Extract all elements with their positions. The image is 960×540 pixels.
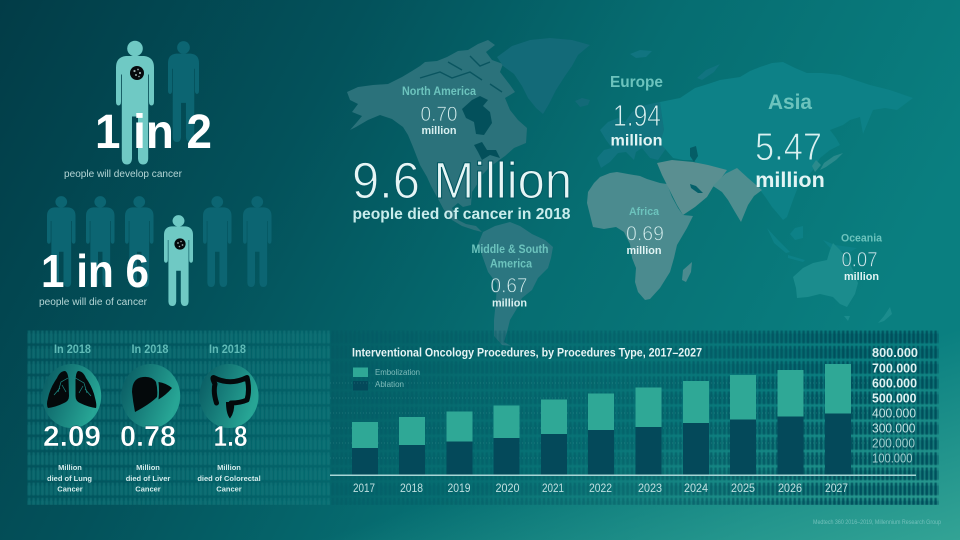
x axis labels: 2027 [825, 481, 848, 495]
caption: liver cancer: Million [136, 463, 160, 472]
caption: lung cancer: Cancer [57, 484, 83, 494]
region: Oceania: million [844, 271, 879, 283]
caption: colorectal cancer [197, 463, 261, 494]
caption: liver cancer [126, 463, 170, 494]
caption: die of cancer: people will die of cancer [39, 297, 148, 308]
icon: tumor [174, 238, 186, 250]
y axis labels: 800.000 [872, 345, 918, 360]
map: North America [347, 40, 527, 232]
icon: affected person [116, 41, 154, 165]
caption: colorectal cancer: Cancer [216, 484, 242, 494]
y axis labels: 700.000 [872, 360, 917, 376]
region: Asia: Asia [768, 91, 812, 114]
panel: liver cancer [120, 344, 180, 494]
caption: develop cancer: people will develop cancer [64, 169, 183, 180]
icons: unaffected people [47, 196, 272, 287]
x axis labels: 2023 [638, 481, 662, 495]
panel: colorectal cancer [197, 344, 261, 494]
icon: affected person [164, 215, 193, 306]
icon: liver [121, 364, 180, 428]
region: Oceania: 0.07 [842, 248, 878, 272]
chart legend: Embolization [375, 368, 420, 377]
map: Persian Gulf [690, 184, 703, 193]
y axis labels [872, 345, 918, 406]
statistic: 1 in 6: 1 in 6 [41, 245, 149, 297]
chart: interventional oncology procedures [330, 345, 918, 495]
panel: lung cancer: In 2018 [54, 344, 92, 356]
y axis labels: 600.000 [872, 376, 917, 390]
region: Asia: 5.47 [755, 126, 822, 169]
map: Madagascar [682, 262, 692, 282]
region: Europe [610, 74, 663, 150]
x axis labels: 2022 [589, 481, 612, 495]
map: South America [478, 222, 553, 346]
x axis labels: 2020 [496, 481, 520, 495]
icon: lungs [42, 364, 101, 428]
headline: 9.6 Million: 9.6 Million [352, 152, 572, 209]
crowd pattern band [27, 330, 939, 505]
caption: lung cancer: Million [58, 463, 82, 472]
map: Scandinavia and Arctic islands [603, 50, 720, 136]
panel: lung cancer [42, 344, 101, 494]
map: New Zealand and Tasmania [844, 307, 892, 323]
region: Middle and South America: America [490, 258, 533, 270]
caption: colorectal cancer: died of Colorectal [197, 474, 261, 483]
region: Asia: million [755, 169, 825, 192]
map: Middle East [657, 160, 727, 215]
y axis labels: 500.000 [872, 390, 916, 406]
region: North America: million [422, 125, 457, 137]
map: Arctic channels [420, 56, 502, 92]
region: North America: North America [402, 86, 477, 98]
x axis labels: 2021 [542, 481, 564, 495]
caption: liver cancer: died of Liver [126, 474, 170, 483]
panel: 1 in 2 [64, 41, 212, 180]
region: North America [402, 86, 477, 137]
chart: interventional oncology procedures: 100.000 [872, 450, 912, 466]
chart legend: Ablation [375, 380, 404, 389]
statistic: 2.09 million: 2.09 [43, 421, 101, 453]
region: Middle and South America: Middle & South [472, 244, 548, 256]
region: Middle and South America: million [492, 298, 527, 310]
statistic: 1 in 2: 1 in 2 [95, 106, 212, 159]
map: Africa [587, 172, 693, 300]
chart: interventional oncology procedures: 300.000 [872, 420, 916, 436]
map: India [713, 168, 762, 222]
map: Southeast Asia islands [767, 226, 857, 262]
chart axis line [330, 474, 916, 476]
region: Africa: Africa [629, 206, 660, 218]
source note: Medtech 360 2016–2019, Millennium Research Group [813, 520, 942, 526]
x axis labels: 2018 [400, 481, 423, 495]
region: Middle and South America [472, 244, 548, 310]
region: North America: 0.70 [420, 103, 458, 126]
panel: 1 in 6 [39, 196, 272, 308]
x axis labels: 2024 [684, 481, 708, 495]
caption: colorectal cancer: Million [217, 463, 241, 472]
panel: liver cancer: In 2018 [132, 344, 169, 356]
caption: lung cancer [47, 463, 92, 494]
map: Greenland [497, 38, 590, 114]
region: Africa [626, 206, 664, 257]
map: Europe [597, 102, 667, 168]
region: Asia [755, 91, 825, 192]
region: Oceania [841, 232, 883, 283]
region: Europe: 1.94 [613, 98, 661, 133]
map: Caspian Sea [690, 146, 698, 162]
map: Asia [660, 62, 913, 220]
map: Hudson Bay [462, 96, 492, 135]
region: Africa: million [626, 245, 662, 257]
region: Oceania: Oceania [841, 232, 883, 244]
icon: colon [200, 364, 258, 428]
x axis labels [353, 481, 848, 495]
map: Japan and Korea [812, 153, 843, 172]
chart: interventional oncology procedures: 400.000 [872, 406, 916, 420]
panel: colorectal cancer: In 2018 [209, 344, 247, 356]
icon: tumor [130, 66, 144, 80]
caption: liver cancer: Cancer [135, 484, 161, 494]
x axis labels: 2017 [353, 481, 375, 495]
map: Iceland [575, 98, 590, 107]
x axis labels: 2019 [448, 481, 471, 495]
region: Europe: Europe [610, 74, 663, 91]
bars: embolization [352, 364, 851, 448]
map: Great Lakes [474, 142, 500, 160]
region: Middle and South America: 0.67 [490, 274, 528, 298]
map: Australia [793, 243, 858, 307]
statistic: 0.78 million: 0.78 [120, 421, 176, 453]
chart legend [353, 368, 420, 390]
headline caption: people died of cancer in 2018 [352, 206, 571, 223]
world map [347, 38, 913, 346]
x axis labels: 2025 [731, 481, 755, 495]
chart title: Interventional Oncology Procedures, by Procedures Type, 2017–2027 [352, 346, 702, 360]
bars: ablation [352, 414, 851, 475]
chart: interventional oncology procedures: 200.000 [872, 436, 915, 450]
region: Europe: million [610, 132, 662, 150]
statistic: 1.8 million: 1.8 [214, 421, 248, 453]
caption: lung cancer: died of Lung [47, 474, 92, 483]
x axis labels: 2026 [778, 481, 802, 495]
region: Africa: 0.69 [626, 222, 664, 246]
icon: unaffected person [168, 41, 199, 142]
